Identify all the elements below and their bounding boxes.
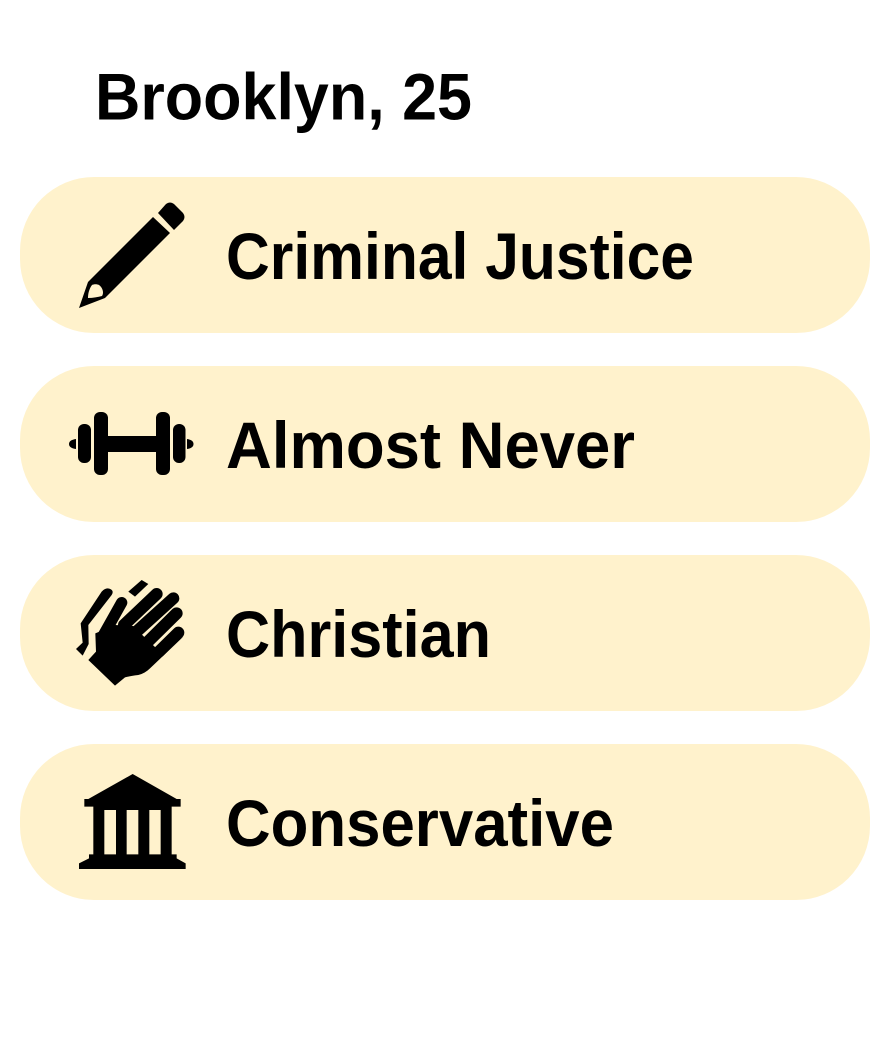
panel: politics — [20, 744, 870, 900]
pill background: major — [20, 177, 870, 333]
title: Brooklyn, 25 — [95, 60, 472, 134]
label: Criminal Justice: Criminal Justice — [226, 219, 694, 293]
icon: government building — [79, 774, 186, 869]
icon: dumbbell — [69, 412, 194, 475]
label: Christian: Christian — [226, 597, 491, 671]
icon: pencil — [79, 202, 184, 308]
pill background: religion — [20, 555, 870, 711]
label: Conservative: Conservative — [226, 786, 614, 860]
pill background: exercise — [20, 366, 870, 522]
panel: religion — [20, 555, 870, 711]
label: Almost Never: Almost Never — [226, 408, 635, 482]
icon: praying hands — [76, 580, 183, 686]
panel: exercise — [20, 366, 870, 522]
panel: major — [20, 177, 870, 333]
pill background: politics — [20, 744, 870, 900]
